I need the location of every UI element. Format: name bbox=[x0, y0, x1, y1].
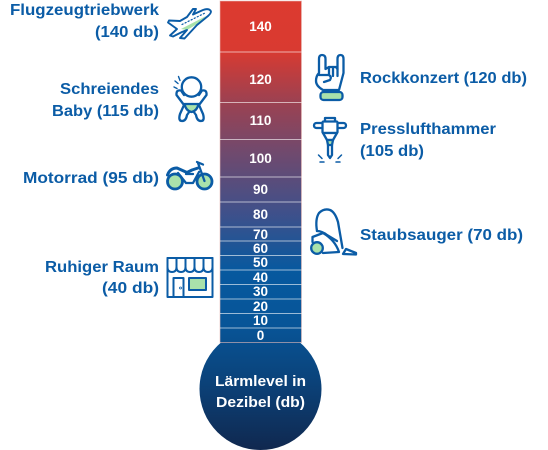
scale numbers: 50 bbox=[253, 255, 268, 270]
label: Flugzeugtriebwerk: (140 db) bbox=[95, 24, 159, 41]
icon: shop bbox=[168, 258, 212, 297]
bulb label bbox=[215, 373, 306, 411]
scale numbers: 70 bbox=[253, 227, 268, 242]
bulb label: Lärmlevel in bbox=[215, 373, 306, 390]
icon: airplane bbox=[168, 9, 211, 38]
label: Ruhiger Raum: Ruhiger Raum bbox=[45, 259, 159, 276]
icon: rock hand bbox=[316, 55, 344, 100]
scale numbers: 100 bbox=[249, 151, 272, 166]
label: Rockkonzert: Rockkonzert (120 db) bbox=[360, 70, 527, 87]
icon: vacuum cleaner bbox=[311, 209, 356, 254]
scale numbers: 120 bbox=[249, 72, 272, 87]
label: Staubsauger: Staubsauger (70 db) bbox=[360, 227, 523, 244]
scale numbers: 80 bbox=[253, 207, 268, 222]
scale numbers: 140 bbox=[249, 19, 272, 34]
label: Presslufthammer bbox=[360, 121, 496, 160]
icon: jackhammer bbox=[314, 118, 346, 162]
label: Schreiendes Baby bbox=[52, 81, 159, 120]
thermometer bulb bbox=[200, 328, 322, 450]
thermometer column bbox=[220, 1, 302, 342]
label: Schreiendes Baby: Baby (115 db) bbox=[52, 103, 159, 120]
thermometer bbox=[200, 1, 322, 450]
bulb label: Dezibel (db) bbox=[216, 394, 305, 411]
label: Ruhiger Raum bbox=[45, 259, 159, 297]
scale numbers: 30 bbox=[253, 284, 268, 299]
label: Motorrad: Motorrad (95 db) bbox=[23, 170, 159, 187]
scale numbers: 90 bbox=[253, 182, 268, 197]
scale numbers bbox=[249, 19, 272, 343]
label: Flugzeugtriebwerk bbox=[10, 2, 159, 41]
scale numbers: 0 bbox=[257, 328, 264, 343]
label: Presslufthammer: (105 db) bbox=[360, 143, 424, 160]
icon: crying baby bbox=[174, 76, 207, 121]
label: Schreiendes Baby: Schreiendes bbox=[60, 81, 159, 98]
scale numbers: 20 bbox=[253, 299, 268, 314]
scale numbers: 60 bbox=[253, 241, 268, 256]
label: Ruhiger Raum: (40 db) bbox=[102, 280, 159, 297]
icon: motorcycle bbox=[168, 162, 212, 189]
scale numbers: 40 bbox=[253, 270, 268, 285]
scale numbers: 110 bbox=[250, 113, 271, 128]
label: Flugzeugtriebwerk: Flugzeugtriebwerk bbox=[10, 2, 159, 19]
label: Presslufthammer: Presslufthammer bbox=[360, 121, 496, 138]
scale numbers: 10 bbox=[253, 313, 268, 328]
